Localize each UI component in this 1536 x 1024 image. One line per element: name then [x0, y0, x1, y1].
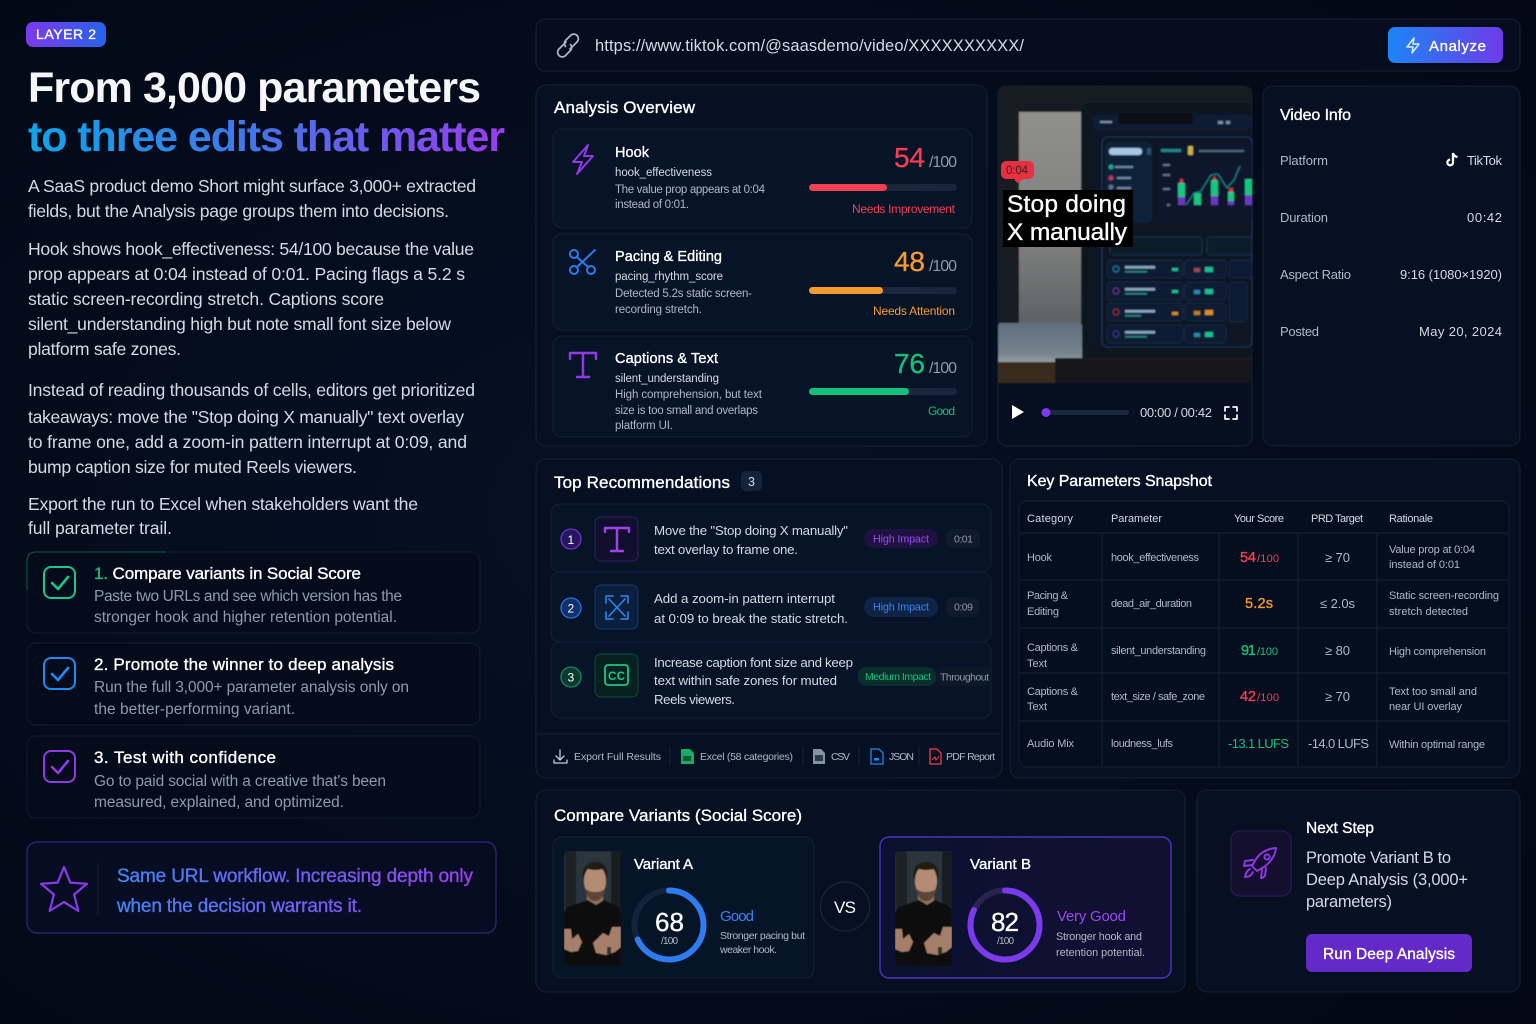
recommendation 3: 3	[568, 670, 574, 684]
row: silent understanding: High comprehension	[1389, 646, 1486, 658]
export bar: JSON	[889, 751, 914, 763]
step 3 card: 3. Test with confidence	[94, 748, 276, 767]
paragraph: hook, pacing and captions: static screen-recording stretch. Captions score	[28, 289, 384, 309]
recommendation 2: 0:09	[954, 602, 973, 614]
captions card: High comprehension, but text	[615, 389, 763, 401]
table header: PRD Target	[1311, 513, 1363, 525]
row: pacing	[1027, 590, 1499, 618]
variant B card	[880, 837, 1171, 978]
paragraph: hook, pacing and captions: Hook shows hook_effectiveness: 54/100 because the value	[28, 239, 474, 260]
pacing card: recording stretch.	[615, 304, 702, 316]
score ring: 68	[634, 890, 704, 960]
row: posted: Posted	[1280, 324, 1319, 339]
row: posted: May 20, 2024	[1419, 324, 1502, 339]
icon: rocket	[1231, 831, 1291, 896]
paragraph: prioritized takeaways	[28, 380, 475, 477]
paragraph: hook, pacing and captions: platform safe zones.	[28, 339, 181, 359]
button: run deep analysis: Run Deep Analysis	[1323, 946, 1455, 963]
icon: excel	[681, 749, 694, 764]
row: text size: Text too small and	[1389, 686, 1477, 698]
pacing card: Pacing & Editing	[615, 249, 722, 265]
row: pacing: stretch detected	[1389, 606, 1468, 618]
icon: link	[558, 34, 578, 57]
export bar	[554, 747, 995, 765]
paragraph: prioritized takeaways: takeaways: move the "Stop doing X manually" text overlay	[28, 407, 464, 427]
step 1 card	[27, 552, 480, 633]
count badge: 3	[748, 475, 755, 489]
variant A card: Good	[720, 908, 754, 925]
panel: analysis overview: Analysis Overview	[554, 98, 696, 117]
step 3 card: Go to paid social with a creative that's been	[94, 773, 386, 790]
hook card: Hook	[615, 145, 650, 161]
title	[28, 64, 505, 161]
pacing card: 48	[894, 246, 925, 277]
badge: layer 2: LAYER 2	[36, 26, 96, 42]
variant B card: Stronger hook and	[1056, 931, 1142, 943]
captions card	[553, 336, 972, 437]
hook card: hook_effectiveness	[615, 167, 712, 179]
hook card: Needs Improvement	[852, 202, 956, 216]
table header: Parameter	[1111, 513, 1162, 525]
row: text size: text_size / safe_zone	[1111, 691, 1205, 703]
step 1 card: 1. Compare variants in Social Score	[94, 564, 361, 583]
paragraph: hook, pacing and captions	[28, 239, 474, 359]
row: pacing: dead_air_duration	[1111, 598, 1192, 610]
captions card: size is too small and overlaps	[615, 405, 758, 417]
recommendation 3	[551, 642, 991, 718]
icon: csv	[813, 749, 825, 764]
timestamp badge: 0:04	[1006, 165, 1029, 177]
row: duration	[1280, 210, 1502, 225]
row: silent understanding: Text	[1027, 658, 1047, 670]
row: platform	[1280, 153, 1502, 168]
pacing card	[553, 234, 972, 330]
callout: same URL workflow	[27, 842, 496, 933]
left column	[26, 22, 505, 933]
panel: next step	[1197, 790, 1520, 992]
row: posted	[1280, 324, 1502, 339]
row: hook: instead of 0:01	[1389, 559, 1460, 571]
row: hook: 54	[1240, 550, 1256, 566]
captions card: Good	[928, 404, 955, 418]
row: silent understanding: ≥ 80	[1325, 643, 1350, 658]
intro paragraph: A SaaS product demo Short might surface 3,000+ extracted	[28, 176, 476, 196]
row: aspect ratio: 9:16 (1080×1920)	[1400, 267, 1502, 282]
row: text size	[1027, 686, 1477, 713]
variant B card: Very Good	[1057, 908, 1126, 925]
row: text size: 42	[1240, 689, 1256, 705]
hook card: instead of 0:01.	[615, 199, 689, 211]
score ring: 82: 82	[991, 907, 1019, 937]
VS marker: VS	[834, 898, 856, 917]
analyze button: Analyze	[1429, 38, 1486, 55]
recommendation 1: Move the "Stop doing X manually"	[654, 523, 848, 538]
score ring: 68: 68	[655, 907, 684, 937]
panel: video player	[998, 86, 1252, 446]
pacing card: /100	[929, 258, 957, 275]
recommendation 2: 2	[568, 602, 574, 616]
panel: top recommendations	[536, 459, 1002, 778]
recommendation 3: CC	[608, 671, 625, 683]
player controls	[1012, 405, 1237, 420]
step 2 card	[27, 643, 480, 725]
row: audio mix: -13.1 LUFS	[1228, 736, 1289, 751]
callout: same URL workflow: Same URL workflow. Increasing depth only	[117, 866, 474, 887]
row: text size: near UI overlay	[1389, 701, 1462, 713]
badge: layer 2	[26, 22, 106, 47]
panel: next step: Next Step	[1306, 820, 1374, 837]
row: audio mix	[1027, 736, 1485, 751]
row: hook: /100	[1257, 553, 1279, 565]
step 3 card	[27, 736, 480, 818]
row: silent understanding: 91	[1241, 643, 1256, 659]
paragraph: export: full parameter trail.	[28, 518, 172, 538]
score ring: 68: /100	[661, 936, 678, 947]
hook card: The value prop appears at 0:04	[615, 184, 766, 196]
table header: Rationale	[1389, 513, 1433, 525]
panel: video info: Video Info	[1280, 107, 1351, 124]
row: duration: 00:42	[1467, 210, 1502, 225]
recommendation 1: 1	[568, 533, 574, 547]
step 1 card: stronger hook and higher retention potential.	[94, 609, 397, 626]
title: From 3,000 parameters	[28, 64, 481, 112]
step 2 card: the better-performing variant.	[94, 701, 295, 718]
icon: pdf	[930, 749, 941, 764]
row: hook	[1027, 544, 1475, 571]
row: pacing: ≤ 2.0s	[1320, 596, 1356, 611]
VS marker	[820, 882, 870, 931]
row: audio mix: Audio Mix	[1027, 738, 1074, 750]
caption overlay: Stop doing	[1007, 191, 1126, 218]
captions card: /100	[929, 360, 957, 377]
video frame: laptop on a desk	[998, 86, 1252, 383]
captions card: silent_understanding	[615, 373, 719, 385]
captions card: platform UI.	[615, 420, 673, 432]
hook card: 54	[894, 142, 925, 173]
panel: key parameters snapshot: Key Parameters Snapshot	[1027, 473, 1213, 490]
export bar: Export Full Results	[574, 751, 661, 763]
row: aspect ratio: Aspect Ratio	[1280, 267, 1351, 282]
intro paragraph	[28, 176, 476, 221]
intro paragraph: fields, but the Analysis page groups them into decisions.	[28, 201, 449, 221]
paragraph: hook, pacing and captions: silent_understanding high but note small font size below	[28, 314, 451, 335]
table header	[1027, 513, 1433, 525]
row: platform: TikTok	[1467, 153, 1502, 168]
variant B card: Variant B	[970, 856, 1031, 873]
recommendation 2: High Impact	[873, 602, 929, 614]
recommendation 3: text within safe zones for muted	[654, 673, 837, 688]
caption overlay: X manually	[1007, 219, 1128, 246]
captions card: Captions & Text	[615, 351, 718, 367]
pacing card: Needs Attention	[873, 304, 955, 318]
caption overlay	[1003, 190, 1133, 247]
recommendation 1: text overlay to frame one.	[654, 542, 798, 557]
row: hook: ≥ 70	[1325, 550, 1350, 565]
thumbnail: variant B	[895, 851, 952, 967]
table header: Category	[1027, 513, 1074, 525]
row: pacing: Editing	[1027, 606, 1059, 618]
hook card: /100	[929, 154, 957, 171]
recommendation 1: 0:01	[954, 534, 973, 546]
row: text size: Captions &	[1027, 686, 1079, 698]
panel: top recommendations: Top Recommendations	[554, 473, 730, 492]
recommendation 1	[551, 504, 991, 572]
variant A card: Variant A	[634, 856, 693, 873]
export bar: CSV	[831, 751, 850, 763]
recommendation 3: Throughout	[940, 672, 989, 684]
row: pacing: 5.2s	[1245, 596, 1273, 612]
step 1 card: Paste two URLs and see which version has the	[94, 588, 402, 605]
recommendation 3: Medium Impact	[865, 671, 931, 683]
row: hook: Value prop at 0:04	[1389, 544, 1475, 556]
table header: Your Score	[1234, 513, 1284, 525]
row: silent understanding: Captions &	[1027, 642, 1079, 654]
icon: json	[871, 749, 883, 764]
panel: next step: Promote Variant B to	[1306, 849, 1451, 867]
export bar: Excel (58 categories)	[700, 751, 793, 763]
score ring: 82: /100	[997, 936, 1014, 947]
hook card	[553, 129, 972, 228]
paragraph: export	[28, 494, 418, 538]
paragraph: prioritized takeaways: Instead of reading thousands of cells, editors get prioritized	[28, 380, 475, 400]
URL bar: https://www.tiktok.com/@saasdemo/video/XXXXXXXXXX/	[595, 37, 1024, 55]
variant A card: weaker hook.	[719, 944, 777, 956]
row: hook: hook_effectiveness	[1111, 552, 1200, 564]
thumbnail: variant A	[564, 851, 621, 967]
recommendation 2	[551, 572, 991, 642]
row: silent understanding: silent_understanding	[1111, 645, 1206, 657]
recommendation 3: Increase caption font size and keep	[654, 655, 853, 670]
step 3 card: measured, explained, and optimized.	[94, 794, 344, 811]
row: text size: /100	[1257, 692, 1279, 704]
row: audio mix: loudness_lufs	[1111, 738, 1174, 750]
timestamp badge	[1001, 161, 1034, 183]
recommendation 2: at 0:09 to break the static stretch.	[654, 611, 848, 626]
row: hook: Hook	[1027, 552, 1052, 564]
player controls: 00:00 / 00:42	[1140, 405, 1212, 420]
title: to three edits that matter	[28, 113, 505, 161]
row: pacing: Pacing &	[1027, 590, 1069, 602]
row: pacing: Static screen-recording	[1389, 590, 1499, 602]
panel: video info	[1263, 86, 1520, 446]
panel: key parameters snapshot	[1010, 459, 1520, 778]
step 2 card: 2. Promote the winner to deep analysis	[94, 655, 394, 674]
row: text size: ≥ 70	[1325, 689, 1350, 704]
recommendation 3: Reels viewers.	[654, 692, 735, 707]
count badge	[741, 471, 762, 491]
table frame	[1019, 501, 1509, 767]
panel: next step: parameters)	[1306, 893, 1392, 911]
row: duration: Duration	[1280, 210, 1328, 225]
row: silent understanding	[1027, 642, 1486, 670]
analyze button	[1388, 27, 1503, 63]
score ring: 82	[970, 890, 1040, 960]
panel: compare variants	[536, 790, 1185, 992]
panel: analysis overview	[536, 85, 987, 446]
export bar: PDF Report	[946, 751, 995, 763]
recommendation 2: Add a zoom-in pattern interrupt	[654, 591, 835, 606]
paragraph: hook, pacing and captions: prop appears at 0:04 instead of 0:01. Pacing flags a 5.2 s	[28, 264, 465, 284]
variant B card: retention potential.	[1056, 947, 1145, 959]
URL bar	[536, 19, 1520, 71]
row: audio mix: Within optimal range	[1389, 739, 1485, 751]
row: platform: Platform	[1280, 153, 1328, 168]
variant A card	[553, 837, 814, 978]
paragraph: export: Export the run to Excel when stakeholders want the	[28, 494, 418, 514]
row: text size: Text	[1027, 701, 1047, 713]
row: audio mix: -14.0 LUFS	[1308, 736, 1369, 751]
pacing card: Detected 5.2s static screen-	[615, 288, 752, 300]
variant A card: Stronger pacing but	[720, 930, 805, 942]
pacing card: pacing_rhythm_score	[615, 271, 723, 283]
paragraph: prioritized takeaways: bump caption size for muted Reels viewers.	[28, 457, 357, 477]
panel: compare variants: Compare Variants (Social Score)	[554, 806, 802, 825]
recommendation 1: High Impact	[873, 534, 929, 546]
row: silent understanding: /100	[1257, 646, 1278, 658]
step 2 card: Run the full 3,000+ parameter analysis only on	[94, 679, 409, 696]
captions card: 76	[894, 348, 925, 379]
paragraph: prioritized takeaways: to frame one, add a zoom-in pattern interrupt at 0:09, and	[28, 432, 467, 452]
button: run deep analysis	[1306, 934, 1472, 972]
row: aspect ratio	[1280, 267, 1502, 282]
callout: same URL workflow: when the decision warrants it.	[116, 896, 362, 917]
panel: next step: Deep Analysis (3,000+	[1306, 871, 1468, 889]
